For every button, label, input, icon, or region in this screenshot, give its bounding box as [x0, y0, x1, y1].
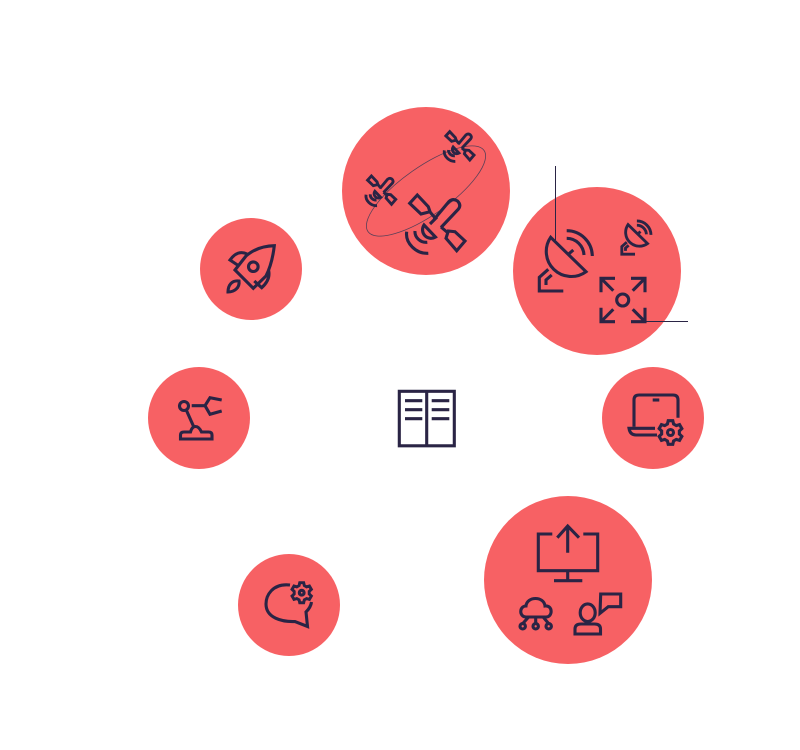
icon: laptop with gear	[629, 395, 682, 444]
panel: data sharing circle	[484, 496, 652, 664]
icon: person with speech bubble	[575, 594, 621, 634]
icon: monitor with upload arrow	[538, 526, 598, 581]
icon: speech bubble with gear	[266, 583, 312, 626]
orbit ellipse	[354, 131, 498, 251]
icon: robot arm	[180, 398, 222, 439]
panel: robot arm circle	[148, 367, 250, 469]
icon: small satellite upper right	[444, 132, 474, 161]
vertical leader line	[554, 166, 556, 240]
panel: chat circle	[238, 554, 340, 656]
panel: satellites circle	[342, 107, 510, 275]
icon: expanding arrows target	[601, 278, 645, 322]
panel: rocket circle	[200, 218, 302, 320]
icon: large satellite	[407, 195, 465, 253]
icon: cloud network	[520, 598, 551, 629]
icon: large satellite dish	[539, 231, 592, 291]
panel: ground station circle	[513, 166, 688, 355]
icon: open book	[399, 391, 454, 446]
icon: small satellite left	[366, 176, 396, 206]
panel: laptop circle	[602, 367, 704, 469]
icon: rocket	[228, 246, 274, 292]
icon: small satellite dish	[622, 221, 651, 254]
horizontal leader line	[645, 320, 688, 322]
